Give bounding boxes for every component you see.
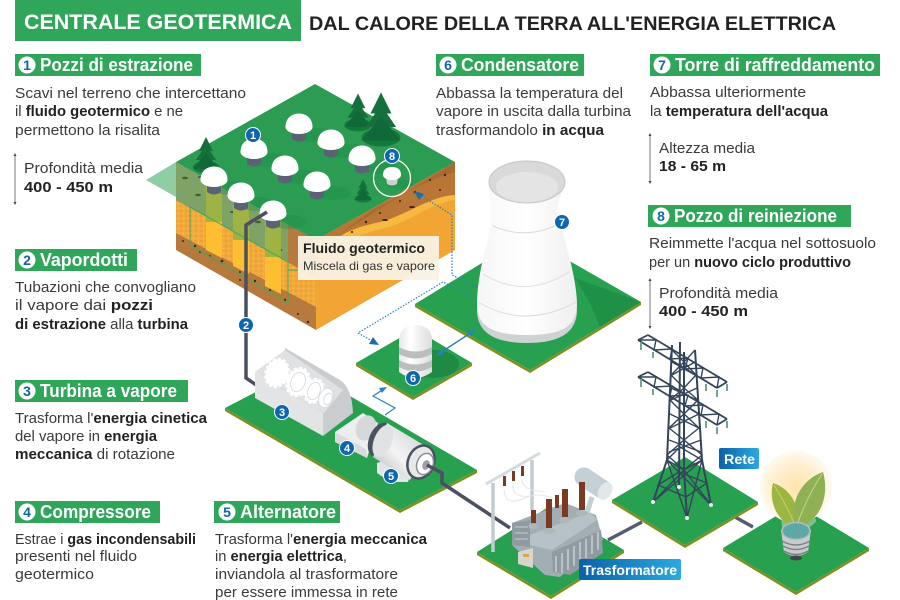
panel: alternatore: inviandola al trasformatore [215,566,398,583]
reinjection well [374,160,413,196]
panel: condensatore: vapore in uscita dalla turbina [436,103,632,120]
well shafts [206,186,281,294]
label: rete: Rete [724,452,756,467]
badge 8: 8 [389,151,395,163]
panel: compressore [15,501,196,583]
panel: condensatore: Condensatore [461,55,579,75]
panel: turbina a vapore: Turbina a vapore [40,381,177,401]
panel: pozzi di estrazione: il fluido geotermico e ne [15,103,183,120]
label: fluido geotermico: Miscela di gas e vapore [303,259,435,273]
title [15,0,301,41]
badge 7 [554,214,570,230]
badge 1: 1 [250,130,256,142]
panel: alternatore: in energia elettrica, [215,548,347,565]
panel: pozzi di estrazione: permettono la risalita [15,122,161,139]
compressor [335,412,380,458]
badge 8 [384,148,400,164]
geothermal ground block [146,84,455,330]
badge 3: 3 [279,407,285,419]
label: fluido geotermico [298,236,439,280]
panel: compressore: presenti nel fluido [15,548,137,565]
badge 4: 4 [344,443,351,455]
right soil face [316,162,455,330]
panel: vapordotti [15,249,196,333]
underground pipe loop [190,207,300,303]
panel: pozzi di estrazione: Profondità media [24,160,144,177]
panel: torre di raffreddamento: 7 [658,57,666,73]
dotted water circuit arrows [358,191,475,345]
panel: condensatore: Abbassa la temperatura del [436,85,623,102]
condenser [399,325,432,378]
badge 7: 7 [559,217,565,229]
panel: pozzo di reiniezione: Reimmette l'acqua nel sottosuolo [649,235,876,252]
badge 2: 2 [243,320,249,332]
cooling tower [477,161,577,343]
panel: turbina a vapore: 3 [23,383,31,399]
panel: compressore: Compressore [40,502,151,522]
bulb platform [723,504,869,595]
badge 6 [406,370,420,386]
panel: pozzo di reiniezione: Profondità media [659,285,779,302]
panel: vapordotti: Tubazioni che convogliano [15,279,196,296]
top grass [176,84,455,240]
subtitle: DAL CALORE DELLA TERRA ALL'ENERGIA ELETTRICA [309,14,836,35]
panel: pozzi di estrazione: Pozzi di estrazione [40,55,193,75]
panel: pozzi di estrazione: 1 [23,57,31,73]
label: trasformatore: Trasformatore [583,563,677,578]
panel: compressore: 4 [23,504,31,520]
panel: pozzo di reiniezione: 8 [657,208,665,224]
panel: pozzo di reiniezione: Pozzo di reiniezione [674,206,837,226]
double arrow: condenser to tower [436,329,476,356]
panel: vapordotti: Vapordotti [40,250,128,270]
panel: alternatore: Alternatore [240,502,336,522]
title: CENTRALE GEOTERMICA [24,11,292,34]
badge 2 [238,318,254,332]
label: fluido geotermico: Fluido geotermico [303,241,425,256]
light bulb with leaves [760,451,832,560]
panel: condensatore: trasformandolo in acqua [436,122,605,139]
steam duct [246,212,267,389]
panel: torre di raffreddamento: la temperatura dell'acqua [650,103,829,120]
condenser platform [356,325,472,400]
badge 5: 5 [388,471,394,483]
transformer [486,453,615,577]
pylon feet [651,485,713,520]
depth indicator triangle [146,162,176,197]
turbine [255,348,353,436]
panel: alternatore [214,501,428,600]
cooling tower platform [415,161,641,373]
panel: pozzo di reiniezione [648,205,876,329]
panel: pozzi di estrazione: 400 - 450 m [24,179,113,196]
badge 1 [246,128,260,142]
left soil face [176,162,316,330]
panel: turbina a vapore [15,380,208,463]
connector: grid to bulb [735,517,753,527]
panel: alternatore: 5 [223,504,231,520]
panel: torre di raffreddamento: Abbassa ulteriormente [650,84,806,101]
grid platform [612,457,758,548]
badge 5 [384,468,398,484]
panel: vapordotti: di estrazione alla turbina [15,316,189,333]
panel: alternatore: Trasforma l'energia meccanica [215,531,428,548]
panel: compressore: geotermico [15,566,94,583]
badge 3 [274,404,290,420]
connector: transformer to grid [608,522,642,540]
panel: pozzo di reiniezione: 400 - 450 m [659,303,748,320]
panel: torre di raffreddamento: Altezza media [659,140,756,157]
transformer platform [477,506,624,599]
arrow: alternator to condenser [373,387,395,415]
panel: turbina a vapore: del vapore in energia [15,428,158,445]
panel: pozzi di estrazione: Scavi nel terreno che intercettano [15,85,246,102]
badge 6: 6 [410,373,416,385]
panel: vapordotti: 2 [23,252,31,268]
transmission line to transformer [427,465,510,528]
panel: vapordotti: il vapore dai pozzi [15,297,153,314]
panel: compressore: Estrae i gas incondensabili [15,531,196,548]
badge 4 [340,440,354,456]
label: rete [719,448,759,469]
panel: pozzo di reiniezione: per un nuovo ciclo produttivo [649,254,851,271]
label: trasformatore [579,559,681,580]
panel: torre di raffreddamento: 18 - 65 m [659,158,726,175]
wells [200,114,396,229]
electricity pylon [638,335,727,518]
panel: torre di raffreddamento [648,54,880,184]
panel: turbina a vapore: meccanica di rotazione [15,446,175,463]
panel: turbina a vapore: Trasforma l'energia cinetica [15,410,208,427]
panel: torre di raffreddamento: Torre di raffreddamento [675,55,875,75]
panel: pozzi di estrazione [14,54,246,205]
trees [193,92,400,203]
panel: condensatore: 6 [444,57,452,73]
turbine platform [225,348,477,513]
panel: condensatore [436,54,632,139]
alternator [363,419,439,483]
